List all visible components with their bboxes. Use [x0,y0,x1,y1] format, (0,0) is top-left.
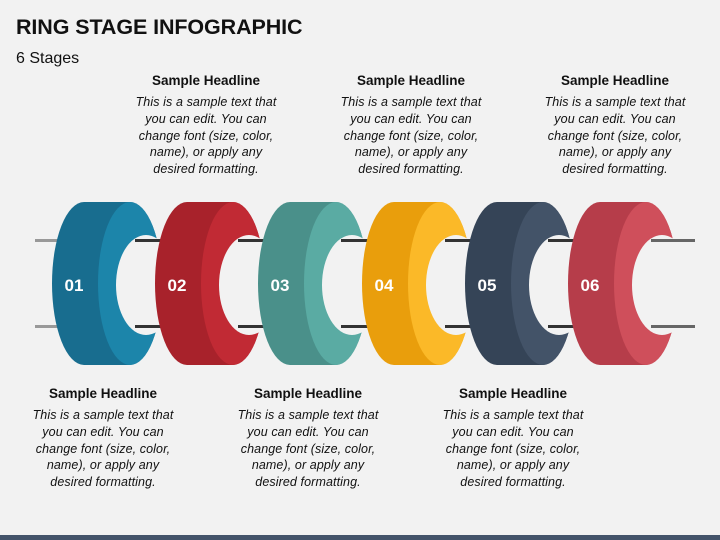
text: stage 6: desired formatting. [562,162,668,176]
text: stage 6: This is a sample text that [545,95,685,109]
text: stage 2: you can edit. You can [145,112,267,126]
text: stage 3 [238,386,379,489]
text: stage 2: change font (size, color, [139,129,273,143]
ring 03: 03 [271,276,289,295]
ring 03 [258,202,401,365]
text: stage 3: change font (size, color, [241,442,375,456]
text: stage 4: Sample Headline [357,73,465,88]
text: stage 5 [443,386,584,489]
title: RING STAGE INFOGRAPHIC [16,15,302,39]
ring 05: 05 [478,276,496,295]
text: stage 1 [33,386,174,489]
footer bar [0,535,720,540]
text: stage 4: change font (size, color, [344,129,478,143]
ring 02 [155,202,298,365]
text: stage 3: Sample Headline [254,386,362,401]
ring 06 [568,202,695,365]
text: stage 6: name), or apply any [559,145,671,159]
text: stage 6: change font (size, color, [548,129,682,143]
ring 01: 01 [65,276,83,295]
text: stage 4: name), or apply any [355,145,467,159]
text: stage 4 [341,73,482,176]
text: stage 1: This is a sample text that [33,408,173,422]
text: stage 4: desired formatting. [358,162,464,176]
ring 01 [52,202,195,365]
text: stage 1: Sample Headline [49,386,157,401]
text: stage 4: This is a sample text that [341,95,481,109]
text: stage 1: name), or apply any [47,458,159,472]
ring 04 [362,202,505,365]
text: stage 5: Sample Headline [459,386,567,401]
text: stage 2: This is a sample text that [136,95,276,109]
text: stage 1: change font (size, color, [36,442,170,456]
text: stage 5: change font (size, color, [446,442,580,456]
text: stage 1: desired formatting. [50,475,156,489]
text: stage 5: desired formatting. [460,475,566,489]
text: stage 5: name), or apply any [457,458,569,472]
subtitle: 6 Stages [16,50,79,67]
ring 06: 06 [581,276,599,295]
text: stage 2: desired formatting. [153,162,259,176]
text: stage 6 [545,73,686,176]
text: stage 3: name), or apply any [252,458,364,472]
text: stage 2 [136,73,277,176]
ring 05 [465,202,608,365]
text: stage 2: name), or apply any [150,145,262,159]
text: stage 5: This is a sample text that [443,408,583,422]
text: stage 3: you can edit. You can [247,425,369,439]
text: stage 6: you can edit. You can [554,112,676,126]
rods left [35,239,65,328]
ring 04: 04 [375,276,394,295]
text: stage 4: you can edit. You can [350,112,472,126]
text: stage 5: you can edit. You can [452,425,574,439]
text: stage 2: Sample Headline [152,73,260,88]
text: stage 3: desired formatting. [255,475,361,489]
text: stage 1: you can edit. You can [42,425,164,439]
text: stage 6: Sample Headline [561,73,669,88]
text: stage 3: This is a sample text that [238,408,378,422]
ring 02: 02 [168,276,186,295]
